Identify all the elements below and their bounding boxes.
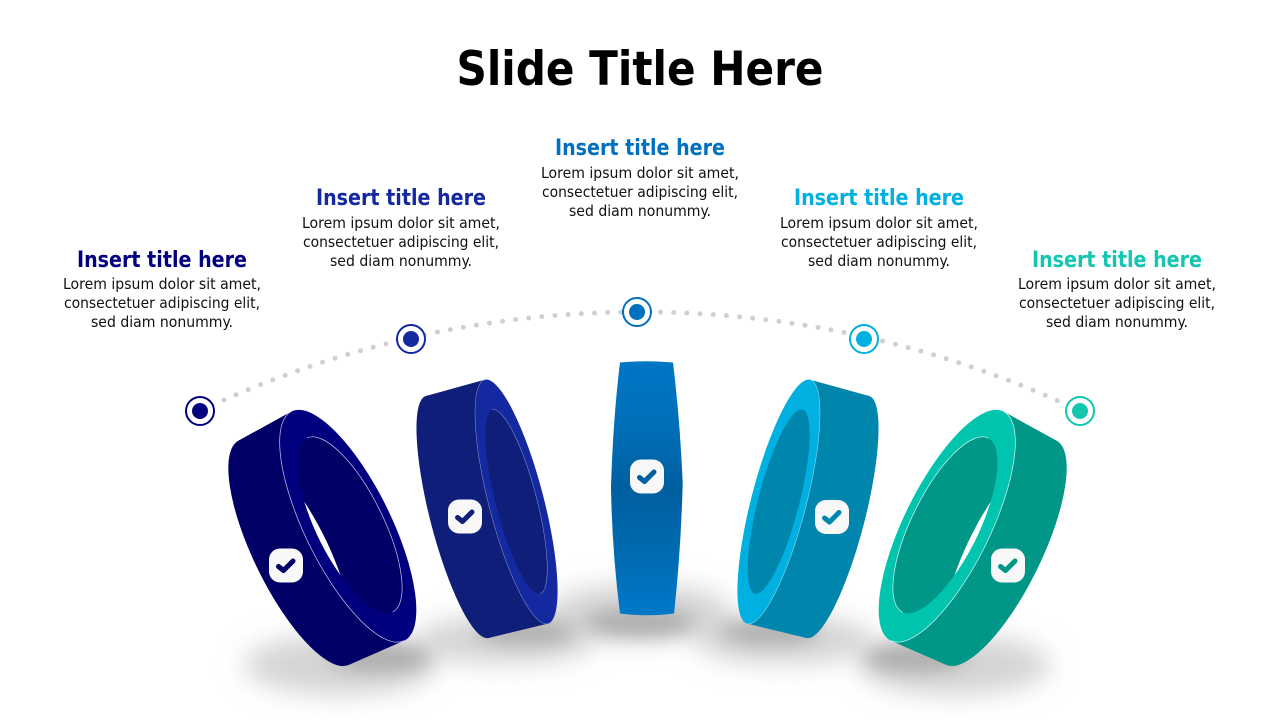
text block 2: sed diam nonummy. xyxy=(330,252,472,270)
text block 1: Insert title here xyxy=(77,248,247,273)
ring 1 xyxy=(202,392,443,685)
marker 1 xyxy=(186,397,214,425)
marker 2 xyxy=(397,325,425,353)
text block 5: Insert title here xyxy=(1032,248,1202,273)
text block 2: consectetuer adipiscing elit, xyxy=(303,233,499,251)
text block 1: consectetuer adipiscing elit, xyxy=(64,294,260,312)
icon: check badge 3 xyxy=(630,460,664,494)
icon: check badge 1 xyxy=(269,548,303,582)
text block 5: Lorem ipsum dolor sit amet, xyxy=(1018,275,1216,293)
ring 4 xyxy=(721,373,895,646)
icon: check badge 2 xyxy=(448,500,482,534)
title: Slide Title Here xyxy=(456,42,824,97)
text block 3 xyxy=(541,136,739,220)
text block 5: sed diam nonummy. xyxy=(1046,313,1188,331)
text block 1: Lorem ipsum dolor sit amet, xyxy=(63,275,261,293)
icon: check badge 4 xyxy=(815,500,849,534)
ring 3 xyxy=(611,361,683,615)
text block 4: sed diam nonummy. xyxy=(808,252,950,270)
marker 5 xyxy=(1066,397,1094,425)
dotted arc connector xyxy=(200,312,1080,411)
text block 3: sed diam nonummy. xyxy=(569,202,711,220)
text block 1: sed diam nonummy. xyxy=(91,313,233,331)
text block 5 xyxy=(1018,248,1216,331)
text block 4: consectetuer adipiscing elit, xyxy=(781,233,977,251)
text block 3: Lorem ipsum dolor sit amet, xyxy=(541,164,739,182)
text block 5: consectetuer adipiscing elit, xyxy=(1019,294,1215,312)
text block 2 xyxy=(302,186,500,270)
text block 4 xyxy=(780,186,978,270)
icon: check badge 5 xyxy=(991,548,1025,582)
ring 2 xyxy=(400,373,574,646)
text block 2: Insert title here xyxy=(316,186,486,211)
text block 3: Insert title here xyxy=(555,136,725,161)
text block 4: Insert title here xyxy=(794,186,964,211)
floor shadows xyxy=(244,584,1051,695)
ring 5 xyxy=(852,392,1093,685)
text block 1 xyxy=(63,248,261,331)
marker 4 xyxy=(850,325,878,353)
marker 3 xyxy=(623,298,651,326)
text block 3: consectetuer adipiscing elit, xyxy=(542,183,738,201)
text block 2: Lorem ipsum dolor sit amet, xyxy=(302,214,500,232)
text block 4: Lorem ipsum dolor sit amet, xyxy=(780,214,978,232)
